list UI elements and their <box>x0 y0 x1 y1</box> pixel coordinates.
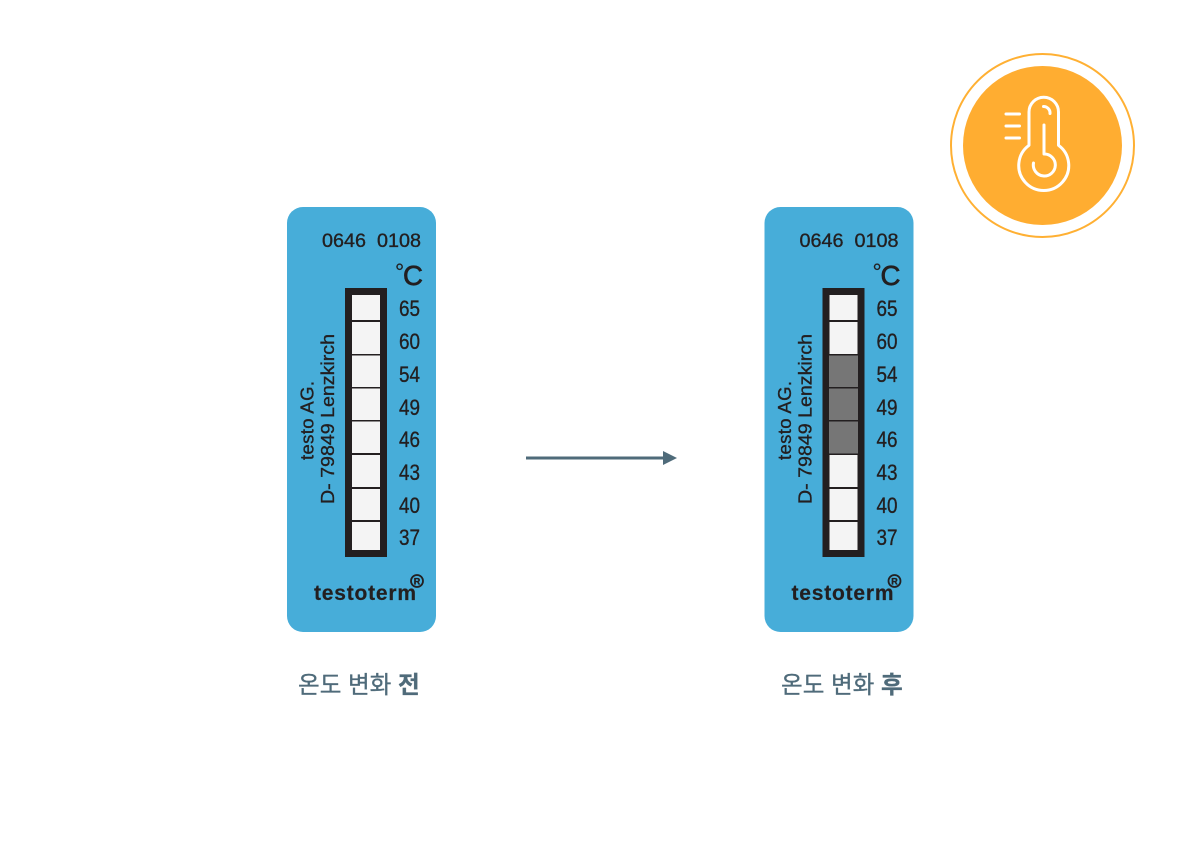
manufacturer address <box>296 334 338 504</box>
brand name: testoterm <box>792 582 894 605</box>
product code: 0646 <box>800 230 844 252</box>
product code: 0108 <box>377 230 421 252</box>
temperature scale numbers <box>876 296 898 550</box>
unit: Celsius <box>872 259 900 291</box>
unit: Celsius: C <box>880 260 900 291</box>
manufacturer address <box>774 334 816 504</box>
temperature scale numbers: 49 <box>399 395 420 420</box>
temperature scale numbers: 60 <box>399 329 420 354</box>
brand name: R <box>414 576 421 586</box>
unit: Celsius <box>395 259 423 291</box>
panel: label before temperature change <box>287 207 436 632</box>
product code <box>322 230 421 252</box>
temperature scale numbers: 65 <box>399 296 420 321</box>
temperature indicator strip <box>345 288 387 557</box>
product code: 0646 <box>322 230 366 252</box>
manufacturer address: testo AG. <box>774 381 795 460</box>
temperature scale numbers <box>399 296 420 550</box>
temperature scale numbers: 37 <box>876 525 898 550</box>
caption: before temperature change: 온도 변화 전 <box>298 672 420 699</box>
caption: after temperature change: 온도 변화 후 <box>781 672 903 699</box>
panel: label after temperature change <box>764 207 914 632</box>
temperature scale numbers: 43 <box>876 460 898 485</box>
temperature scale numbers: 54 <box>399 362 420 387</box>
temperature indicator strip with three darkened cells <box>822 288 864 557</box>
product code <box>800 230 898 252</box>
label card background <box>287 207 436 632</box>
temperature scale numbers: 43 <box>399 460 420 485</box>
manufacturer address: D- 79849 Lenzkirch <box>317 334 338 504</box>
unit: Celsius: ° <box>872 259 882 285</box>
icon: thermometer badge <box>951 54 1134 237</box>
temperature scale numbers: 54 <box>876 362 898 387</box>
unit: Celsius: C <box>403 260 423 291</box>
manufacturer address: testo AG. <box>296 381 318 460</box>
temperature scale numbers: 46 <box>876 427 898 452</box>
brand name: testoterm <box>314 582 416 605</box>
temperature scale numbers: 40 <box>399 493 420 518</box>
brand name: R <box>891 576 898 586</box>
temperature scale numbers: 37 <box>399 525 420 550</box>
manufacturer address: D- 79849 Lenzkirch <box>794 334 816 504</box>
product code: 0108 <box>854 230 898 252</box>
temperature scale numbers: 49 <box>876 395 898 420</box>
temperature scale numbers: 46 <box>399 427 420 452</box>
temperature scale numbers: 40 <box>876 493 898 518</box>
unit: Celsius: ° <box>395 259 404 285</box>
label card background <box>764 207 914 632</box>
arrow <box>526 451 677 465</box>
temperature scale numbers: 60 <box>876 329 898 354</box>
temperature scale numbers: 65 <box>876 296 898 321</box>
